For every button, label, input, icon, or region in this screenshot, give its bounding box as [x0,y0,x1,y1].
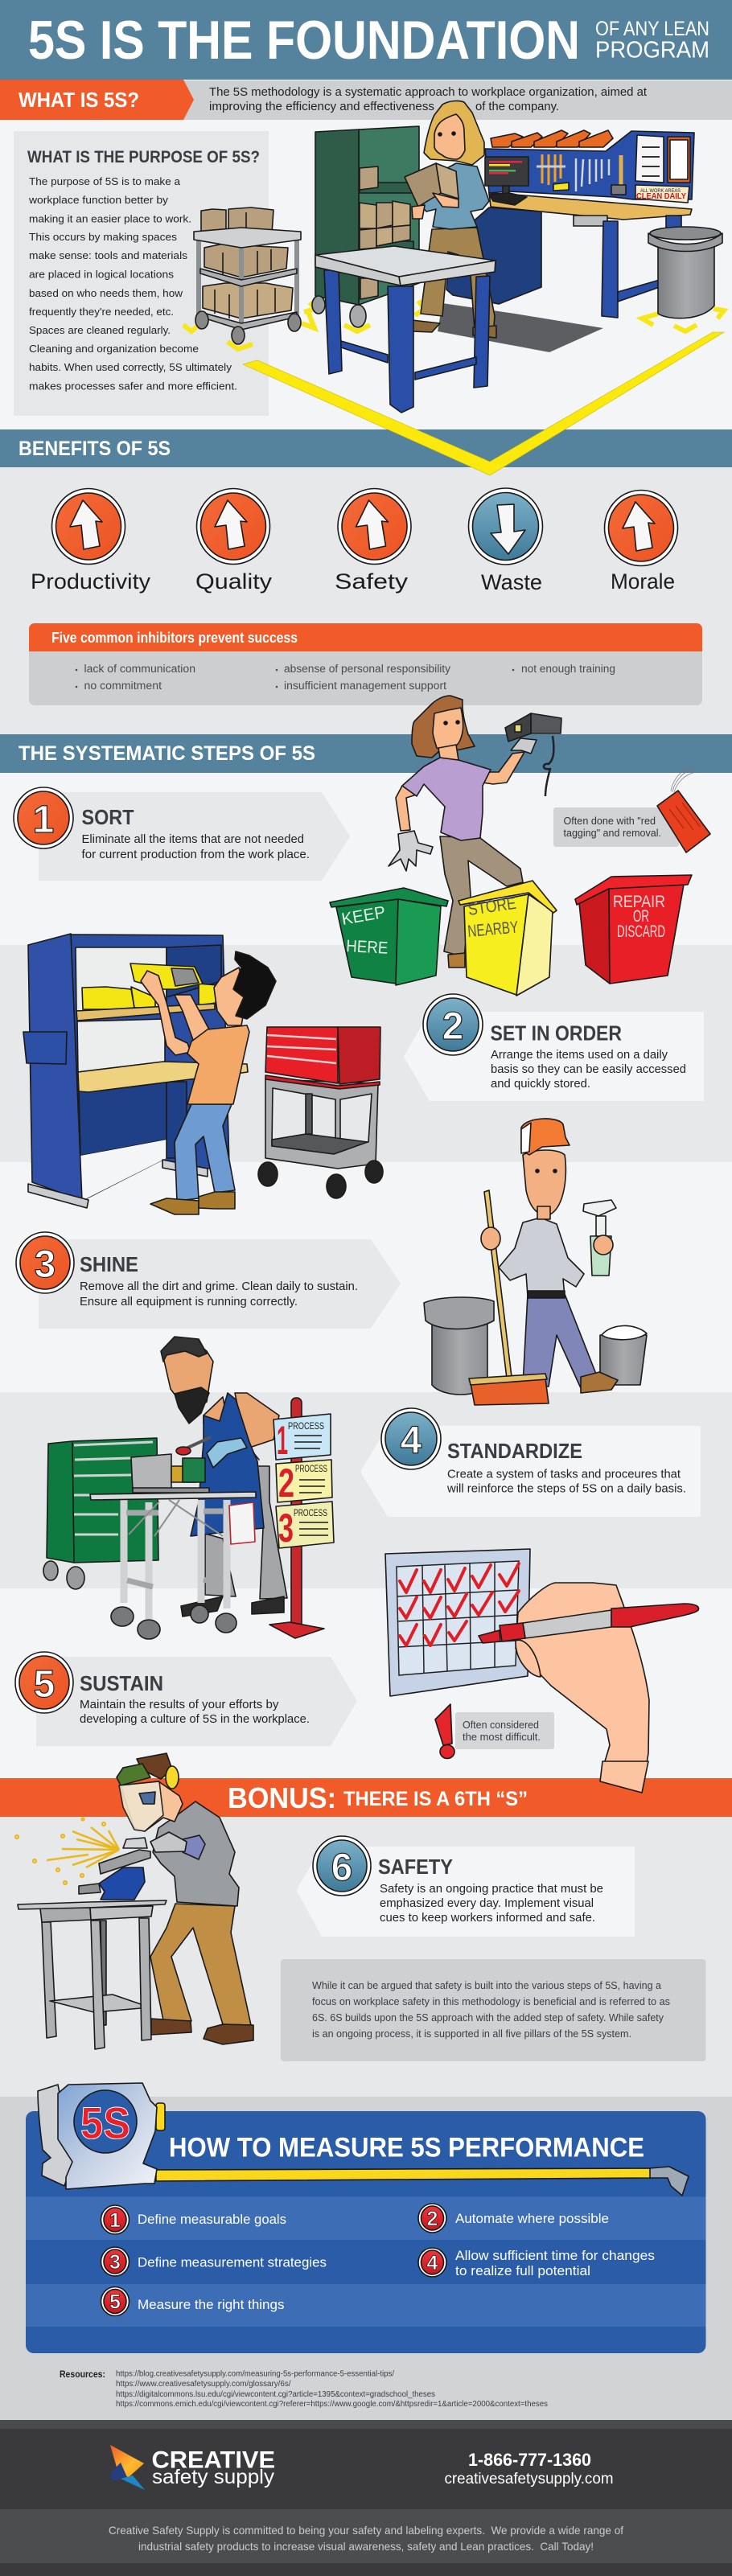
resources: https://blog.creativesafetysupply.com/measuring-5s-performance-5-essential-tips/ [116,2369,394,2379]
thumb [516,1640,541,1677]
sign 3: PROCESS [294,1507,327,1518]
step 3: shine [16,1232,401,1329]
panel: circle arrows, benefits [31,488,677,594]
inhibitors list: lack of communication [84,663,195,675]
badge 6: 6 [331,1847,352,1889]
sign 3: 3 [278,1506,294,1551]
measure item 2: Automate where possible [455,2211,609,2226]
logo wordmark: safety supply [152,2466,275,2488]
sort heading: SORT [82,805,134,829]
safety description: Safety is an ongoing practice that must be [380,1882,603,1896]
shirt [499,1218,584,1296]
panel body text: This occurs by making spaces [29,231,178,243]
measure item 2 [418,2204,609,2233]
badge 2 [423,994,483,1055]
lowered arm [396,786,417,831]
hand on broom [481,1227,500,1250]
standardize description [446,1467,686,1496]
panel body text: make sense: tools and materials [29,249,188,261]
benefit labels: Quality [195,569,273,594]
title suffix: PROGRAM [595,37,709,63]
icon: quality up [196,489,270,565]
callout: red tagging: tagging" and removal. [563,827,661,839]
icon: exclamation mark [435,1704,454,1758]
resources [60,2369,548,2409]
grey trousers [257,1466,287,1599]
resources: https://www.creativesafetysupply.com/glossary/6s/ [116,2380,291,2389]
sort description [82,832,310,861]
computer monitor [485,157,528,194]
sign: clean daily: ALL WORK AREAS [640,188,681,194]
standardize description: will reinforce the steps of 5S on a daily basis. [446,1481,686,1496]
measure heading: HOW TO MEASURE 5S PERFORMANCE [169,2133,644,2163]
bonus banner [0,1778,732,1817]
hair [137,1753,172,1779]
shoulder and arm [235,1393,279,1460]
measure item 1 [101,2205,286,2234]
measure item 3: Define measurement strategies [138,2255,327,2270]
resources: https://digitalcommons.lsu.edu/cgi/viewcontent.cgi?article=1395&context=gradschool_theses [116,2390,435,2399]
sustain description: Maintain the results of your efforts by [80,1698,279,1711]
neck [537,1206,550,1219]
sparks [15,1818,119,1884]
badge 3: 3 [35,1243,56,1286]
what is 5S banner [0,80,732,120]
contact details: creativesafetysupply.com [444,2471,613,2488]
illustration: workbench with tools [446,130,694,318]
panel: inhibitors [29,623,702,705]
green bin: HERE [346,937,389,958]
bonus subtitle: THERE IS A 6TH “S” [343,1788,528,1810]
yellow bin [459,881,557,996]
set in order description: and quickly stored. [491,1077,590,1091]
illustration: man placing bin [141,951,276,1214]
benefits banner [0,429,732,467]
illustration: sorting bins [330,875,692,996]
resources: Resources: [60,2369,105,2380]
illustration: storage cart with boxes [194,207,301,344]
vise [99,1867,145,1900]
cap [521,1119,570,1155]
orange label arrow [0,80,194,120]
marker barrel front [500,1623,525,1641]
red bin: DISCARD [617,922,665,941]
company statement [109,2524,623,2553]
set in order description: Arrange the items used on a daily [491,1048,668,1062]
icon: company logo [110,2445,145,2490]
badge 5 [15,1652,73,1713]
boots [150,1198,199,1214]
company statement: industrial safety products to increase visual awareness, safety and Lean practices. Call Today! [138,2540,594,2553]
panel: 6S explanation: 6S. 6S builds upon the 5S approach with the added step of safety. While safety [312,2011,664,2023]
bucket [600,1335,647,1385]
cart legs [124,1500,227,1619]
panel body text: making it an easier place to work. [29,212,191,225]
badge 1 [14,787,73,848]
badge 4 [381,1408,441,1469]
benefit labels [31,569,675,594]
marker body [523,1610,611,1638]
definition text: of the company. [475,101,559,113]
hair [412,696,475,758]
set in order description: basis so they can be easily accessed [491,1062,686,1076]
illustration: welder with grinder [15,1753,253,2049]
safety description: cues to keep workers informed and safe. [380,1911,595,1925]
standardize heading: STANDARDIZE [447,1439,582,1463]
badge 6 [313,1836,371,1896]
benefit labels: Productivity [31,569,151,594]
icon: productivity up [51,489,125,565]
measure item 1: Define measurable goals [138,2212,286,2227]
black hair [233,951,276,1019]
shine description: Remove all the dirt and grime. Clean daily to sustain. [80,1280,358,1293]
panel body text: are placed in logical locations [29,269,175,280]
broom handle [484,1190,512,1378]
logo wordmark: CREATIVE [151,2447,275,2474]
hair [424,101,484,165]
company statement: Creative Safety Supply is committed to being your safety and labeling experts. We provide a wide range of [109,2524,623,2537]
panel: 6S explanation: focus on workplace safety in this methodology is beneficial and is referred to as [312,1995,670,2007]
face [523,1150,565,1215]
illustration: blue shelving [23,934,248,1208]
raised arm [483,752,524,784]
illustration: steel table with blue legs [315,246,496,413]
boot [581,1372,618,1393]
sweater [153,1802,239,1906]
title suffix: OF ANY LEAN [595,18,709,40]
inhibitors header [29,623,702,651]
sustain description [80,1698,310,1726]
chest [204,1397,228,1424]
panel body text: Cleaning and organization become [29,343,199,355]
parts trays [491,130,613,147]
grinder [99,1850,150,1874]
hand on bottle [594,1235,613,1255]
yellow bins [82,984,217,1009]
label text: WHAT IS 5S? [19,88,139,112]
illustration: woman with box [405,101,496,338]
steps heading: THE SYSTEMATIC STEPS OF 5S [19,742,315,765]
shoes [252,1596,284,1614]
trousers [523,1294,598,1388]
safety description: emphasized every day. Implement visual [380,1896,594,1910]
bonus label: BONUS: [228,1781,336,1814]
icon: waste down [468,488,542,565]
table legs [42,1922,56,2038]
panel body text: The purpose of 5S is to make a [29,175,181,187]
orange shirt [187,1025,249,1104]
sustain description: developing a culture of 5S in the workplace. [80,1712,310,1726]
panel: 6S explanation: is an ongoing process, it is supported in all five pillars of the 5S system. [312,2028,631,2040]
logo wordmark [151,2447,275,2488]
table top [40,1908,91,1922]
safety description [380,1882,603,1925]
beard [175,1387,209,1424]
neck [438,745,459,760]
callout: most difficult: Often considered [463,1719,539,1731]
red bin [575,875,692,984]
electronic box [505,713,561,796]
icon: red tag [657,767,710,853]
sign 1: PROCESS [288,1420,324,1432]
title banner [0,0,732,80]
benefit labels: Safety [335,569,409,594]
step 2: set in order [404,994,704,1101]
red bin: REPAIR [613,893,665,911]
icon: morale up [605,491,677,566]
ear defender [166,1766,179,1789]
step 6: safety [296,1836,635,1937]
sign: clean daily [635,185,689,203]
steps banner [0,734,732,773]
measure item 4: to realize full potential [455,2263,590,2278]
illustration: red tool chest on cart [258,1027,383,1198]
inhibitors list: absense of personal responsibility [284,663,450,675]
inhibitors title: Five common inhibitors prevent success [51,630,298,646]
sign 2: PROCESS [295,1463,327,1474]
panel: 6S explanation [281,1959,706,2061]
process sheet and clipboard [635,135,690,183]
blue glove [207,1438,247,1468]
shoe [448,953,465,968]
machine [131,1454,171,1490]
shine description: Ensure all equipment is running correctly. [80,1295,298,1309]
panel body text [28,175,237,392]
illustration: floor corner markers [183,301,724,349]
definition text [209,86,647,113]
upper glove [511,738,537,754]
title suffix [595,18,709,63]
red bin: OR [633,907,649,926]
illustration: green storage cabinet [312,126,419,327]
cart rails [126,1511,223,1587]
safety heading: SAFETY [378,1855,453,1879]
hair [161,1337,207,1362]
trash can [432,1319,487,1395]
check grid [397,1561,519,1675]
goggles [139,1792,155,1804]
yellow bin: NEARBY [467,918,519,941]
callout: most difficult [435,1704,554,1758]
illustration: woman sorting [389,696,561,968]
benefit labels: Morale [611,569,675,594]
contact details [444,2450,613,2488]
sustain heading: SUSTAIN [80,1671,163,1695]
measure item 2: 2 [427,2208,438,2230]
legs [421,228,495,335]
sign 2 [276,1460,332,1506]
blouse [422,163,489,229]
step 4: standardize [360,1408,701,1517]
boots [151,2019,191,2035]
badge 3 [16,1232,74,1293]
belt [528,1291,565,1298]
callout: red tagging [553,767,710,853]
illustration: mechanic at process sign [43,1337,334,1639]
inhibitors list: insufficient management support [284,680,446,692]
illustration: wrist over banner [600,1761,648,1793]
face shield [119,1781,163,1831]
illustration: tape blade [156,2167,689,2196]
sort description: for current production from the work place. [82,848,310,861]
illustration: janitor with broom [424,1119,647,1405]
badge 1: 1 [33,799,54,841]
hanging checklist [229,1502,255,1544]
illustration: yellow floor line [243,332,724,475]
resources: https://commons.emich.edu/cgi/viewcontent.cgi?referer=https://www.google.com/&httpsredir=1&article=2000&context=theses [116,2400,548,2409]
illustration: trash can [648,227,722,318]
main title: 5S IS THE FOUNDATION [28,10,580,71]
inhibitors list: no commitment [84,680,162,692]
icon: safety up [338,489,411,565]
illustration: hand with marker [479,1583,698,1793]
badge 5: 5 [34,1663,55,1706]
trousers [150,1904,251,2025]
purple shirt [402,758,491,840]
table shelf [50,1995,141,2012]
set in order description [491,1048,686,1091]
green tool cabinet [43,1438,158,1589]
set in order heading: SET IN ORDER [491,1021,622,1046]
panel: how to measure 5S [26,2083,706,2353]
face [433,708,463,752]
measure item 3: 3 [109,2251,121,2274]
spray bottle [583,1200,616,1276]
marker tip [479,1630,500,1643]
head [214,968,247,1025]
tool in hand [183,1437,211,1450]
stripes [26,2197,706,2327]
hands [412,193,459,219]
step 5: sustain [15,1652,357,1746]
marker cap [611,1604,698,1627]
measure item 1: 1 [109,2209,121,2232]
panel body text: habits. When used correctly, 5S ultimately [29,361,232,373]
illustration: tape measure body: 5S [80,2097,130,2148]
shine heading: SHINE [80,1252,138,1276]
badge 4: 4 [401,1419,422,1462]
panel: 6S explanation: While it can be argued that safety is built into the various steps of 5S, having a [312,1979,662,1991]
illustration: anti-fatigue mat [438,303,603,352]
measure item 4: 4 [427,2252,438,2274]
yellow bin: STORE [467,894,517,919]
arms [141,971,191,1055]
sort description: Eliminate all the items that are not needed [82,832,304,846]
step 1: sort [14,787,350,881]
panel: purpose of 5S [14,131,269,416]
sign: clean daily: CLEAN DAILY [636,192,686,201]
sleeve [183,1835,205,1859]
green bin [330,888,448,985]
measure item 4: Allow sufficient time for changes [455,2248,655,2263]
broom head [471,1378,549,1405]
cart top [90,1492,256,1500]
shine description [80,1280,358,1309]
definition text: The 5S methodology is a systematic approach to workplace organization, aimed at [209,86,647,99]
helmet [117,1764,150,1785]
sign 2: 2 [278,1461,294,1506]
glove [150,1832,187,1852]
measure item 4 [418,2248,655,2278]
panel body text: Spaces are cleaned regularly. [29,324,171,336]
badge 2: 2 [442,1005,463,1048]
panel body text: makes processes safer and more efficient. [29,380,237,392]
panel body text: frequently they're needed, etc. [29,306,174,318]
sign 3 [276,1502,334,1551]
contact details: 1-866-777-1360 [468,2450,591,2470]
head [162,1341,213,1410]
illustration: tape measure body [38,2083,165,2189]
standardize description: Create a system of tasks and proceures that [447,1467,681,1481]
panel heading: WHAT IS THE PURPOSE OF 5S? [27,148,260,166]
measure item 5: Measure the right things [138,2297,285,2312]
table back leg [101,1921,106,2025]
lower glove [389,831,433,871]
measure item 3 [101,2247,327,2276]
inhibitors list [76,663,615,692]
trousers [440,836,523,957]
callout: red tagging: Often done with "red [563,815,656,827]
green bin: KEEP [340,903,387,929]
sign 1: 1 [277,1418,288,1463]
hand tools on pegboard [537,154,626,195]
blue apron [191,1393,264,1536]
inhibitors list: not enough training [521,663,615,675]
definition text: improving the efficiency and effectiveness [209,101,434,113]
footer [0,2420,732,2576]
callout: most difficult: the most difficult. [463,1731,541,1743]
carton held [405,163,441,207]
sign 1 [273,1414,331,1463]
benefit labels: Waste [481,570,542,594]
measure item 5: 5 [109,2290,121,2313]
face [434,114,465,159]
panel body text: workplace function better by [28,194,169,206]
face [121,1781,183,1831]
red checkmarks [400,1563,519,1645]
jeans [175,1104,235,1201]
illustration: checklist [385,1549,530,1696]
measure item 5 [101,2287,285,2316]
benefits heading: BENEFITS OF 5S [19,438,171,460]
red post [291,1398,302,1630]
panel body text: based on who needs them, how [29,287,183,299]
cart wheels [111,1607,134,1626]
